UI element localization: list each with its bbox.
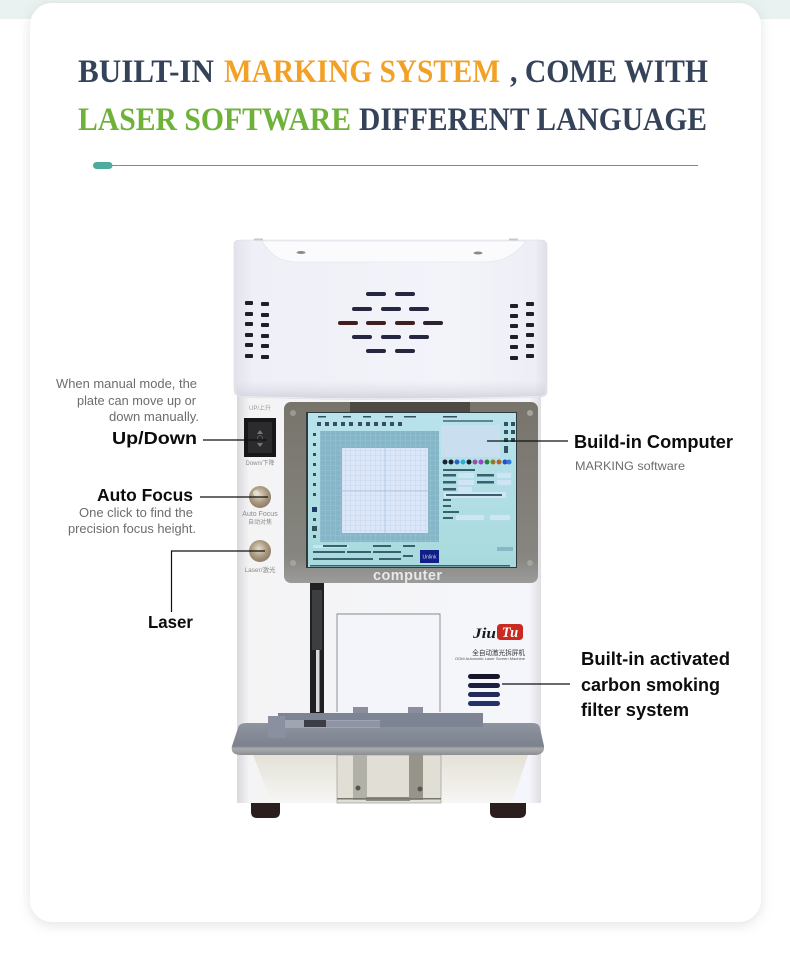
z-axis rail	[310, 583, 324, 713]
up/down switch	[244, 404, 276, 467]
screen: marking software	[306, 412, 517, 568]
up/down description: When manual mode, the	[56, 377, 197, 391]
up/down switch: Down/下降	[245, 459, 275, 467]
title	[78, 54, 708, 138]
up/down switch: UP/上升	[249, 404, 271, 412]
machine body	[237, 395, 541, 803]
title line 1	[78, 54, 708, 90]
title line 2	[78, 102, 707, 138]
hood right vent	[510, 302, 534, 360]
hood centre vent	[338, 292, 443, 353]
machine hood	[234, 238, 547, 400]
software bottom controls	[310, 545, 510, 566]
software bottom controls: Unlink	[423, 554, 437, 560]
title line 2: DIFFERENT LANGUAGE	[359, 102, 707, 138]
callout: build-in computer: MARKING software	[575, 459, 685, 473]
up/down description	[56, 377, 199, 424]
laser button: Laser/激光	[244, 565, 276, 574]
top background band	[0, 0, 790, 19]
logo: JiuTu: 全自动激光拆屏机	[472, 648, 525, 657]
hood left vent	[245, 301, 269, 359]
callout: laser	[148, 551, 265, 632]
auto focus description: precision focus height.	[68, 522, 196, 536]
up/down description: down manually.	[109, 410, 199, 424]
software toolbar	[312, 416, 515, 538]
carbon filter vent	[468, 674, 500, 706]
screen bezel: computer	[373, 568, 442, 584]
fixture plate	[268, 707, 483, 738]
software side panel	[441, 420, 513, 551]
callout: up/down	[56, 377, 267, 448]
screen bezel	[284, 402, 538, 584]
callout: carbon filter: filter system	[581, 700, 689, 720]
callout: laser: Laser	[148, 612, 193, 632]
up/down description: plate can move up or	[77, 394, 196, 408]
auto focus button: Auto Focus	[242, 511, 278, 518]
callout: carbon filter	[502, 649, 730, 720]
machine table	[232, 723, 544, 755]
auto focus button: 自动对焦	[248, 518, 272, 526]
access door	[337, 614, 440, 712]
title line 1: MARKING SYSTEM	[224, 54, 500, 90]
callout: up/down: Up/Down	[112, 428, 197, 448]
auto focus description	[68, 506, 196, 536]
logo: JiuTu	[455, 624, 525, 661]
callout: build-in computer	[487, 432, 733, 473]
machine feet	[251, 803, 526, 818]
logo: JiuTu: Tu	[502, 625, 518, 641]
auto focus description: One click to find the	[79, 506, 193, 520]
marking grid	[320, 431, 439, 542]
logo: JiuTu: Jiu	[472, 626, 496, 642]
title divider	[93, 162, 698, 169]
callout: build-in computer: Build-in Computer	[574, 432, 733, 452]
lower chassis opening	[253, 755, 528, 803]
logo: JiuTu: OGM Automatic Laser Screen Machine	[455, 657, 525, 661]
callout: auto focus: Auto Focus	[97, 485, 193, 505]
machine illustration	[232, 238, 547, 818]
auto focus button	[242, 486, 278, 526]
title line 2: LASER SOFTWARE	[78, 102, 351, 138]
title line 1: , COME WITH	[510, 54, 708, 90]
callout: carbon filter: carbon smoking	[581, 675, 720, 695]
callout: auto focus	[68, 485, 268, 536]
laser button	[244, 540, 276, 574]
callout: carbon filter: Built-in activated	[581, 649, 730, 669]
title line 1: BUILT-IN	[78, 54, 214, 90]
